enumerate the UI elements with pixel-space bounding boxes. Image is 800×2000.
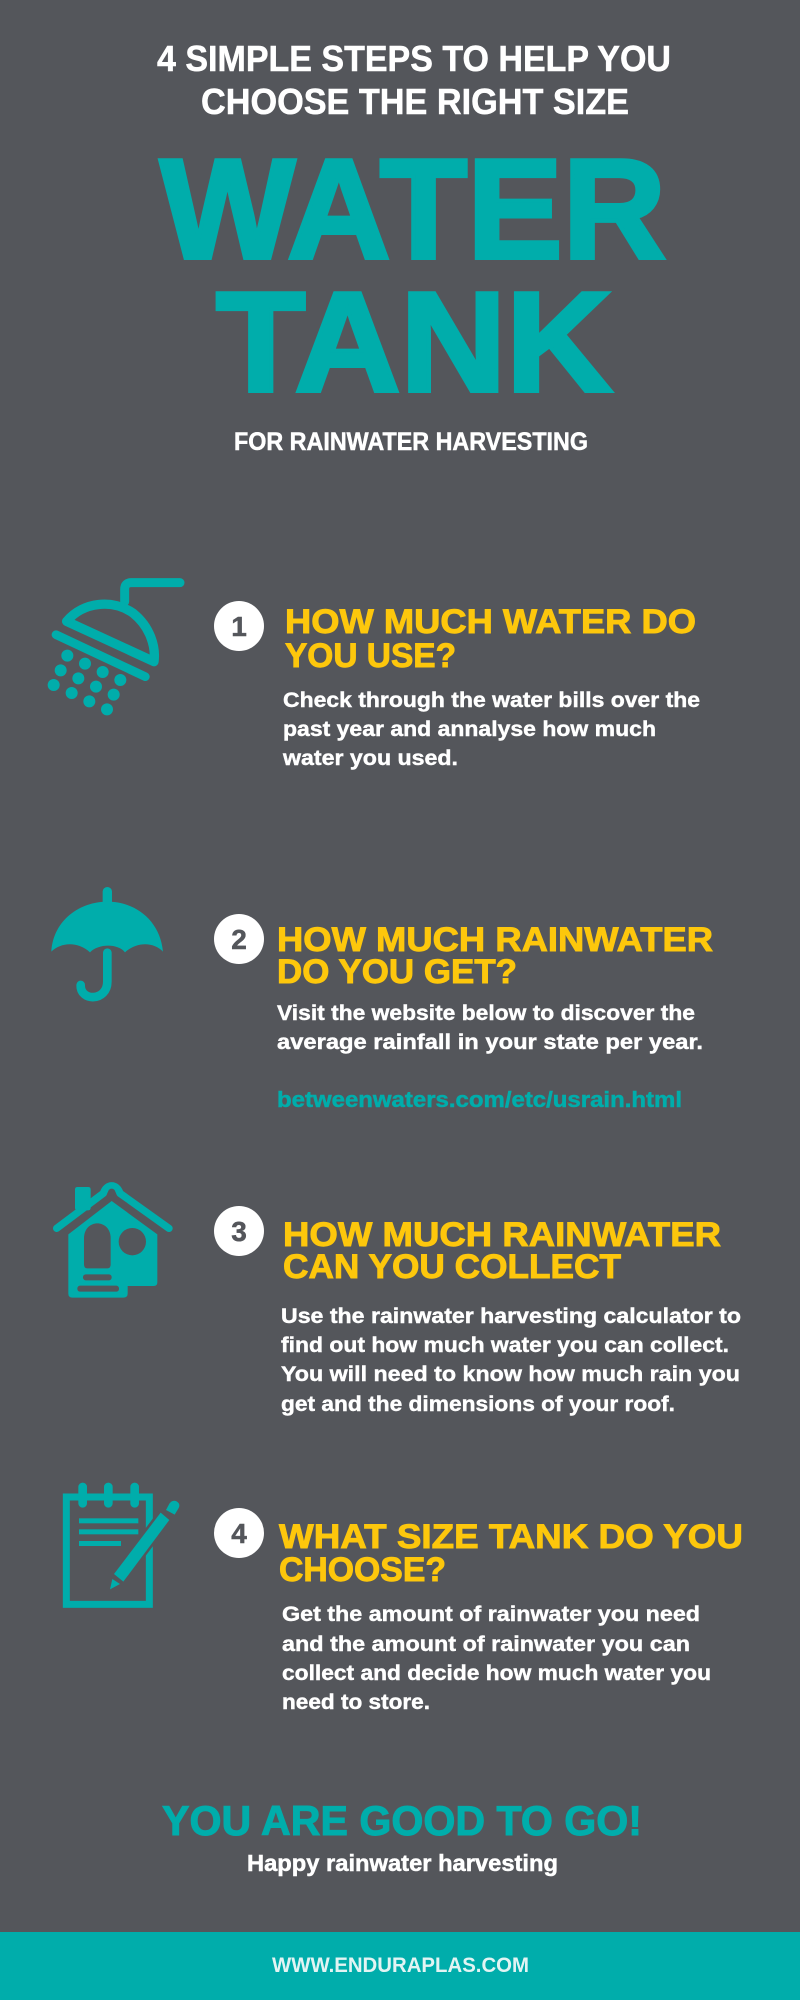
text: step 3: Use the rainwater harvesting calculator to xyxy=(281,1304,741,1328)
number badge 3 xyxy=(214,1206,264,1256)
heading: step 3: HOW MUCH RAINWATER xyxy=(283,1216,721,1254)
number badge 2: 2 xyxy=(231,924,247,955)
subtitle: 4 simple steps: 4 SIMPLE STEPS TO HELP YOU xyxy=(157,38,671,79)
closing message xyxy=(162,1797,642,1876)
heading: step 3: CAN YOU COLLECT xyxy=(283,1248,621,1286)
heading: step 1: HOW MUCH WATER DO xyxy=(285,603,696,641)
icon: notepad and pencil xyxy=(66,1483,179,1604)
text: step 2 xyxy=(277,1001,703,1054)
subtitle: 4 simple steps: CHOOSE THE RIGHT SIZE xyxy=(201,81,629,122)
header xyxy=(157,38,671,456)
icon: shower head xyxy=(48,583,180,715)
text: step 1: Check through the water bills over the xyxy=(283,688,700,712)
heading: step 2: HOW MUCH RAINWATER xyxy=(277,921,713,959)
panel: step 2 xyxy=(51,892,713,1112)
text: step 2: average rainfall in your state per year. xyxy=(277,1030,703,1054)
text: step 4: Get the amount of rainwater you need xyxy=(282,1602,700,1626)
number badge 4: 4 xyxy=(231,1518,247,1549)
text: step 1 xyxy=(282,688,700,770)
number badge 2 xyxy=(214,914,264,964)
heading: step 2: DO YOU GET? xyxy=(277,953,517,991)
footer band xyxy=(0,1932,800,2000)
title: water tank: TANK xyxy=(216,263,612,422)
text: step 4: need to store. xyxy=(282,1690,430,1714)
text: step 3: get and the dimensions of your roof. xyxy=(281,1392,675,1416)
title: water tank: WATER xyxy=(160,130,666,289)
heading: step 4: CHOOSE? xyxy=(279,1551,446,1589)
heading: step 1 xyxy=(285,603,696,675)
icon: umbrella xyxy=(51,892,163,997)
number badge 1: 1 xyxy=(231,611,247,642)
icon: house xyxy=(57,1186,169,1298)
text: step 3 xyxy=(281,1304,741,1416)
heading: step 2 xyxy=(277,921,713,991)
panel: step 1 xyxy=(48,583,700,770)
number badge 4 xyxy=(214,1508,264,1558)
heading: step 3 xyxy=(283,1216,721,1286)
text: step 4 xyxy=(282,1602,711,1714)
tagline: FOR RAINWATER HARVESTING xyxy=(234,428,588,456)
closing heading: YOU ARE GOOD TO GO! xyxy=(162,1797,642,1844)
heading: step 1: YOU USE? xyxy=(285,637,456,675)
number badge 1 xyxy=(214,601,264,651)
panel: step 4 xyxy=(66,1483,743,1714)
closing text: Happy rainwater harvesting xyxy=(247,1850,558,1876)
text: step 2: Visit the website below to discover the xyxy=(277,1001,695,1025)
heading: step 4: WHAT SIZE TANK DO YOU xyxy=(279,1518,743,1556)
link: rainfall website: betweenwaters.com/etc/usrain.html xyxy=(277,1087,682,1112)
heading: step 4 xyxy=(279,1518,743,1589)
text: step 3: You will need to know how much rain you xyxy=(281,1362,740,1386)
panel: step 3 xyxy=(57,1186,741,1416)
number badge 3: 3 xyxy=(231,1216,247,1247)
subtitle: 4 simple steps xyxy=(157,38,671,122)
text: step 1: water you used. xyxy=(282,746,458,770)
text: step 1: past year and annalyse how much xyxy=(283,717,656,741)
text: step 3: find out how much water you can collect. xyxy=(281,1333,729,1357)
footer url: WWW.ENDURAPLAS.COM xyxy=(272,1954,529,1977)
text: step 4: collect and decide how much water you xyxy=(282,1661,711,1685)
text: step 4: and the amount of rainwater you can xyxy=(282,1632,690,1656)
title: water tank xyxy=(160,130,666,422)
